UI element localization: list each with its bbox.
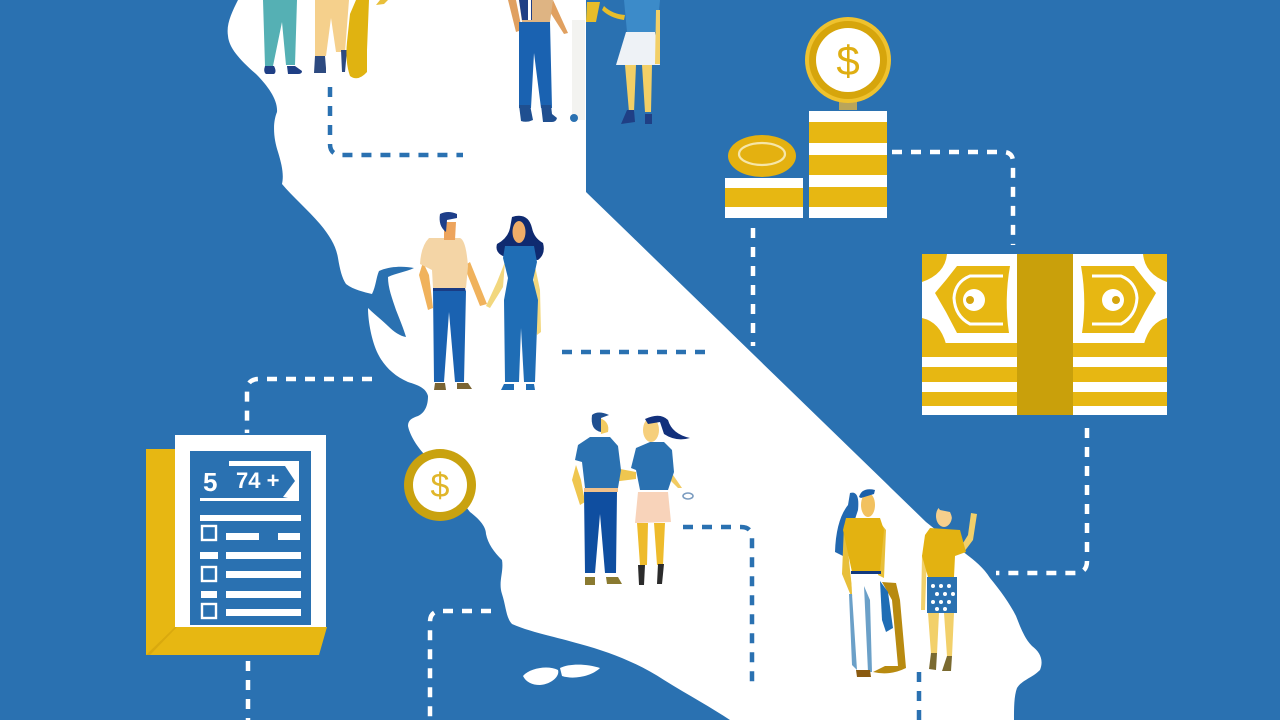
document header price tag (200, 461, 299, 501)
flat coin (728, 135, 796, 177)
coin on coast (404, 449, 476, 521)
man in tan shirt (419, 212, 487, 390)
paper band (1017, 254, 1073, 415)
document header price tag: 5 (203, 467, 217, 497)
connector lines white on blue (247, 152, 1087, 720)
map of California (228, 0, 1042, 720)
banknote bundle (922, 254, 1167, 415)
large coin with dollar sign (805, 17, 891, 110)
stacks of coins (725, 17, 891, 218)
couple in blue walking (572, 412, 693, 585)
short coin stack (725, 178, 803, 218)
document checklist (200, 515, 301, 616)
woman waving (921, 502, 977, 671)
people: top centre pair (508, 0, 660, 124)
people: top left pair (263, 0, 388, 78)
connector lines blue on white (330, 87, 919, 720)
right note portrait panel (1081, 266, 1156, 333)
man with golden bag (835, 489, 906, 677)
couple holding hands (419, 212, 544, 390)
document header price tag: 74 + (236, 468, 279, 493)
woman with ponytail (631, 416, 693, 585)
large coin with dollar sign: $ (836, 37, 860, 84)
map: island off the coast (523, 665, 600, 685)
tall coin stack (809, 111, 887, 218)
top centre figure: grey post and dot (572, 20, 585, 120)
woman in blue jumpsuit (486, 216, 544, 390)
man from behind (572, 412, 636, 585)
left note portrait panel (935, 266, 1010, 333)
document with checklist (146, 435, 327, 655)
couple in yellow (835, 489, 977, 677)
coin on coast: $ (431, 467, 450, 505)
note corners (922, 254, 1167, 344)
document checkboxes (202, 526, 216, 618)
